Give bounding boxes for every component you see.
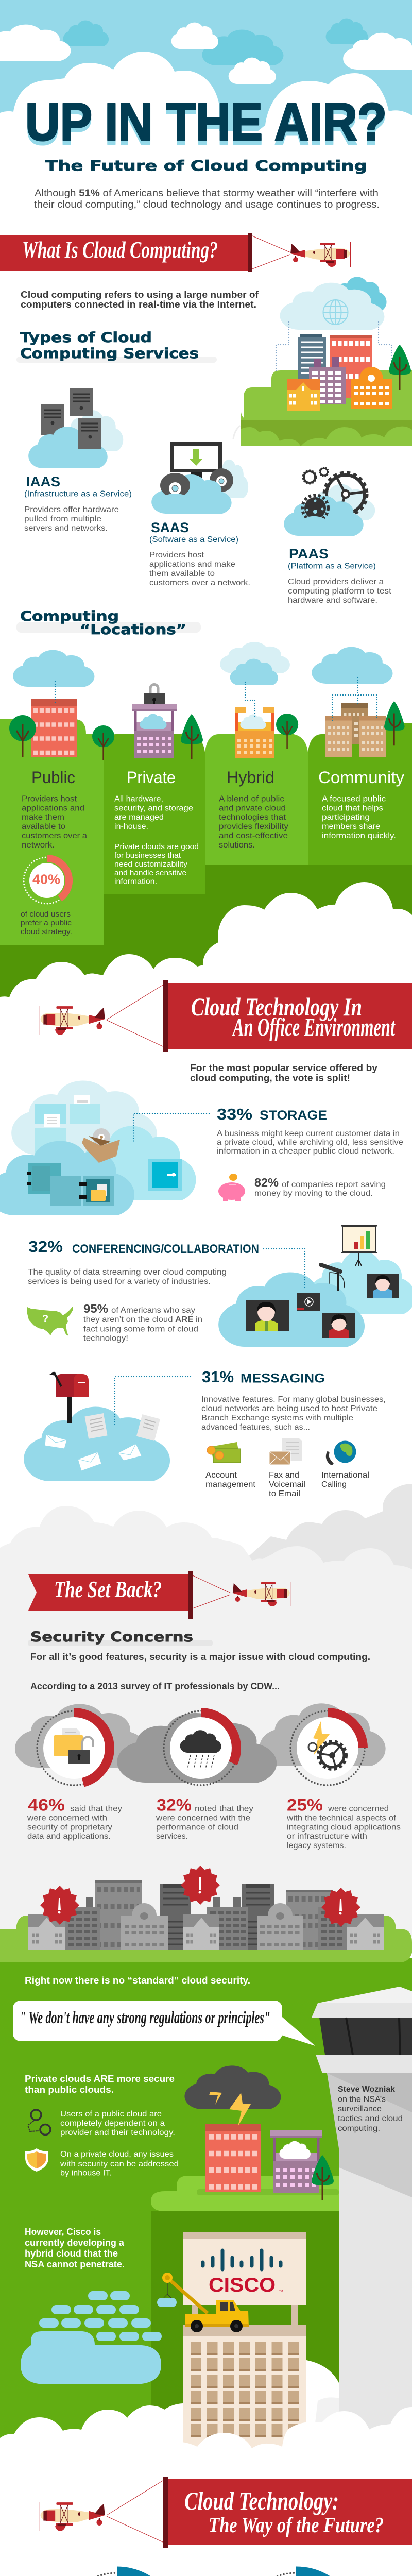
title: UP IN THE AIR? (25, 96, 387, 156)
illustration: storage clouds (0, 1080, 209, 1215)
panel: private text: All hardware, (114, 794, 163, 804)
feature label: account management (205, 1471, 256, 1489)
stat: 46% (27, 1796, 122, 1841)
SAAS text (149, 520, 250, 587)
PAAS text: Cloud providers deliver a (288, 578, 384, 586)
95% stat: 95% (83, 1302, 108, 1315)
private cloud text (60, 2150, 179, 2177)
banner: cloud technology way of the future (40, 2477, 412, 2548)
hero sky with clouds (0, 0, 412, 152)
IAAS text: IAAS (26, 474, 60, 489)
heading: computing locations (16, 608, 201, 638)
PAAS text: computing platform to test (288, 587, 392, 596)
storm cloud over buildings on green hill (151, 2065, 339, 2211)
donut chart: 40%: 40% (32, 872, 60, 887)
feature label: fax and voicemail: to Email (269, 1489, 300, 1498)
stat: 32% (156, 1796, 253, 1841)
conferencing stat: services is being used for a variety of industries. (28, 1277, 211, 1286)
banner: cloud technology way of the future: Cloud Technology: (184, 2486, 339, 2515)
hybrid location illustration (220, 642, 298, 758)
panel: hybrid text: technologies that (219, 813, 286, 822)
donut chart: 40% (24, 857, 70, 904)
private cloud text: by inhouse IT. (60, 2169, 112, 2177)
panel: community text: Community (318, 768, 404, 787)
statement: no standard security: Right now there is no “standard” cloud security. (25, 1975, 250, 1986)
panel: private text: are managed (114, 813, 164, 822)
PAAS text: hardware and software. (288, 596, 377, 605)
feature label: fax and voicemail (269, 1471, 305, 1498)
banner: what is cloud computing: What Is Cloud Computing? (22, 236, 218, 263)
private cloud text: with security can be addressed (60, 2160, 179, 2168)
heading: computing locations: “Locations” (80, 622, 186, 638)
panel: public text: available to (22, 822, 65, 831)
PAAS text (288, 546, 392, 605)
panel: private text: information. (114, 877, 157, 886)
PAAS text: (Platform as a Service) (288, 562, 376, 571)
messaging stat: MESSAGING (241, 1371, 325, 1386)
SAAS text: applications and make (149, 560, 235, 569)
Cisco text block: However, Cisco is (25, 2227, 101, 2237)
messaging stat: Innovative features. For many global businesses, (201, 1395, 386, 1404)
icon: shield (25, 2148, 48, 2172)
conferencing stat: CONFERENCING/COLLABORATION (72, 1242, 259, 1256)
public stat caption (21, 910, 72, 936)
panel: public text: Public (31, 768, 75, 787)
illustration: city island under cloud (233, 277, 412, 453)
illustration: messaging cloud (24, 1371, 191, 1481)
icon: handcuffs (28, 2110, 50, 2135)
Wozniak caption (338, 2085, 403, 2133)
panel: hybrid text: and private cloud (219, 804, 286, 813)
icon: US map (27, 1307, 73, 1336)
subtitle: The Future of Cloud Computing (45, 157, 367, 174)
messaging stat: Branch Exchange systems with multiple (201, 1414, 353, 1422)
stat: 25%: 25% (287, 1796, 323, 1815)
definition text: computers connected in real-time via the Internet. (21, 299, 256, 310)
stat: 46%: data and applications. (27, 1832, 111, 1841)
illustration: brick cloud (21, 2291, 162, 2384)
community location illustration (312, 647, 405, 757)
grey section background with cloud top (0, 1484, 412, 1937)
feature label: international calling: Calling (321, 1480, 347, 1489)
feature label: fax and voicemail: Fax and (269, 1471, 299, 1480)
circle chart: 46% (37, 1711, 111, 1785)
panel: community text: cloud that helps (322, 804, 383, 813)
icon: account management money (207, 1442, 241, 1463)
definition text: Cloud computing refers to using a large number of (21, 290, 259, 300)
banner: what is cloud computing (0, 233, 351, 272)
95% stat: of Americans who say (111, 1306, 195, 1315)
panel: hybrid text: and cost-effective (219, 832, 288, 840)
feature label: international calling: International (321, 1471, 369, 1480)
white cloud bank below locations (0, 882, 412, 1082)
IAAS text (24, 474, 132, 533)
IAAS text: Providers offer hardware (24, 505, 119, 514)
callout: speech bubble quote (13, 2001, 315, 2046)
feature label: account management: management (205, 1480, 256, 1489)
82% stat: 82% (254, 1176, 279, 1189)
stat: 46%: 46% (28, 1796, 65, 1815)
icon: fax and email (269, 1438, 302, 1465)
IAAS text: pulled from multiple (24, 515, 101, 523)
messaging stat: cloud networks are being used to host Private (201, 1404, 377, 1413)
stat: 32%: were concerned with the (156, 1814, 250, 1823)
conferencing stat: 32% (28, 1238, 63, 1256)
Wozniak caption: computing. (338, 2124, 380, 2133)
95% stat (83, 1302, 202, 1343)
private cloud text: On a private cloud, any issues (60, 2150, 174, 2159)
stat: 46%: were concerned with (27, 1814, 107, 1823)
definition text (21, 290, 259, 310)
storage stat: STORAGE (260, 1108, 327, 1123)
feature label: fax and voicemail: Voicemail (269, 1480, 305, 1489)
panel: public text: applications and (22, 804, 84, 813)
Cisco text block: NSA cannot penetrate. (25, 2259, 125, 2269)
dark green block behind Cisco (151, 2211, 339, 2428)
IAAS: icon servers in cloud (28, 388, 123, 468)
panel: private text: Private clouds are good (114, 842, 199, 851)
intro text: Although 51% of Americans believe that stormy weather will “interfere with (35, 188, 379, 199)
heading: security concerns: Security Concerns (30, 1629, 193, 1645)
public stat caption: cloud strategy. (21, 927, 72, 936)
feature label: account management: Account (205, 1471, 237, 1480)
IAAS text: servers and networks. (24, 524, 108, 533)
statement: private clouds more secure (25, 2074, 175, 2095)
panel: hybrid text: provides flexibility (219, 822, 288, 831)
panel: public text: network. (22, 841, 55, 850)
Cisco text block (25, 2227, 125, 2269)
illustration: Cisco billboard and building (183, 2232, 306, 2452)
public location illustration (9, 650, 114, 760)
storage stat: a private cloud, while archiving old, less sensitive (217, 1138, 403, 1147)
panel: private text: for businesses that (114, 851, 181, 860)
callout: speech bubble quote: " We don't have any strong regulations or principles" (20, 2008, 270, 2027)
illustration: Cisco billboard and building: TM (279, 2290, 283, 2293)
stat: 25%: were concerned (328, 1804, 389, 1814)
office intro text (190, 1063, 377, 1083)
banner: cloud technology in an office environment: Cloud Technology In (191, 992, 362, 1021)
circle chart: 25% (290, 1711, 365, 1785)
banner: the set back: The Set Back? (54, 1576, 162, 1602)
banner: the set back (28, 1571, 290, 1619)
white clouds behind Cisco building (0, 2360, 339, 2468)
heading: computing locations: Computing (20, 608, 119, 624)
stat: 25%: with the technical aspects of (286, 1814, 397, 1823)
Wozniak caption: tactics and cloud (338, 2114, 403, 2123)
panel: public text: make them (22, 813, 64, 822)
public cloud text: provider and their technology. (60, 2128, 175, 2137)
public cloud text: completely dependent on a (60, 2119, 165, 2128)
heading: types of cloud computing services: Types of Cloud (20, 330, 152, 346)
circle chart: personal use (239, 2573, 353, 2576)
Wozniak caption: on the NSA’s (338, 2095, 386, 2104)
grey clouds behind circles (15, 1703, 386, 1783)
SAAS text: them available to (149, 569, 215, 578)
IAAS text: (Infrastructure as a Service) (24, 489, 132, 499)
95% stat: technology! (83, 1334, 128, 1343)
office intro text: For the most popular service offered by (190, 1063, 377, 1073)
messaging stat (201, 1368, 386, 1432)
82% stat (254, 1176, 386, 1198)
intro text: their cloud computing,” cloud technology and usage continues to progress. (34, 199, 380, 210)
circle chart: IT professionals (60, 2573, 174, 2576)
panel: hybrid text: solutions. (219, 841, 255, 850)
stat: 25%: legacy systems. (287, 1841, 346, 1850)
panel: private text (114, 768, 199, 886)
feature label: international calling (321, 1471, 369, 1489)
SAAS text: Providers host (149, 551, 204, 560)
PAAS text: PAAS (289, 546, 329, 562)
SAAS text: SAAS (151, 520, 189, 535)
banner: cloud technology in an office environment (40, 980, 412, 1052)
panel: hybrid text (219, 768, 288, 850)
stat: 32%: noted that they (195, 1804, 253, 1814)
stat: 25% (286, 1796, 401, 1850)
survey lead-in: According to a 2013 survey of IT professionals by CDW... (30, 1681, 280, 1691)
stat: 25%: or infrastructure with (287, 1832, 367, 1841)
panel: private text: and handle sensitive (114, 869, 186, 877)
stat: 32%: 32% (157, 1796, 192, 1815)
messaging stat: advanced features, such as... (201, 1423, 310, 1432)
conferencing stat: The quality of data streaming over cloud computing (28, 1268, 227, 1277)
conferencing stat (28, 1238, 259, 1286)
grey city with alert bursts (28, 1866, 384, 1950)
grey column and Steve Wozniak figure (312, 1987, 412, 2442)
stat: 32%: performance of cloud (156, 1823, 238, 1832)
storage stat: information in a cheaper public cloud network. (217, 1147, 394, 1156)
stat: 46%: security of proprietary (27, 1823, 112, 1832)
icon: piggy bank (218, 1174, 245, 1201)
PAAS: icon gears in cloud (284, 467, 375, 536)
security intro text: For all it’s good features, security is a major issue with cloud computing. (30, 1652, 370, 1662)
locations background: dark green and panels (0, 719, 412, 1005)
storage stat: A business might keep current customer data in (217, 1129, 400, 1138)
circle chart: 32% (164, 1711, 238, 1785)
stat: 25%: integrating cloud applications (287, 1823, 401, 1832)
public cloud text: Users of a public cloud are (60, 2110, 162, 2119)
panel: hybrid text: Hybrid (227, 768, 274, 787)
panel: private text: Private (127, 768, 176, 787)
panel: community text (318, 768, 404, 840)
icon: international calling (326, 1440, 356, 1465)
intro text (34, 188, 380, 210)
Cisco text block: currently developing a (25, 2238, 125, 2248)
SAAS text: customers over a network. (149, 579, 250, 587)
white clouds in front of Cisco building (152, 2407, 412, 2473)
illustration: crane truck with brick (157, 2273, 249, 2332)
public stat caption: prefer a public (21, 919, 72, 927)
95% stat: they aren’t on the cloud ARE in (83, 1315, 202, 1324)
Cisco text block: hybrid cloud that the (25, 2248, 118, 2259)
82% stat: of companies report saving (282, 1180, 386, 1189)
title: UP IN THE AIR? (25, 92, 387, 151)
stat: 32%: services. (156, 1832, 188, 1841)
panel: hybrid text: A blend of public (219, 794, 284, 804)
green section background (0, 1916, 412, 2452)
stat: 46%: said that they (70, 1804, 122, 1814)
SAAS text: (Software as a Service) (149, 535, 238, 544)
illustration: conferencing clouds (218, 1225, 412, 1347)
panel: public text: customers over a (22, 832, 87, 840)
Wozniak caption: Steve Wozniak (338, 2085, 395, 2094)
messaging stat: 31% (202, 1368, 234, 1386)
storage stat (217, 1105, 403, 1156)
statement: private clouds more secure: than public clouds. (25, 2084, 114, 2095)
panel: public text (22, 768, 87, 850)
illustration: Cisco billboard and building: CISCO (209, 2274, 276, 2296)
panel: private text: need customizability (114, 860, 188, 869)
heading: types of cloud computing services: Computing Services (20, 346, 199, 362)
SAAS: icon monitor in cloud (151, 442, 248, 514)
panel: community text: information quickly. (322, 832, 396, 840)
panel: community text: participating (322, 813, 370, 822)
storage stat: 33% (217, 1105, 252, 1123)
82% stat: money by moving to the cloud. (254, 1189, 373, 1198)
icon: US map: ? (42, 1313, 48, 1325)
95% stat: fact using some form of cloud (83, 1325, 198, 1333)
panel: private text: in-house. (114, 822, 148, 831)
public cloud text (60, 2110, 175, 2137)
panel: community text: A focused public (322, 794, 386, 804)
panel: public text: Providers host (22, 794, 77, 804)
panel: community text: members share (322, 822, 380, 831)
statement: private clouds more secure: Private clouds ARE more secure (25, 2074, 175, 2084)
public stat caption: of cloud users (21, 910, 71, 919)
office intro text: cloud computing, the vote is split! (190, 1073, 350, 1083)
private location illustration (132, 685, 203, 759)
heading: types of cloud computing services (16, 330, 217, 363)
Wozniak caption: surveillance (338, 2105, 382, 2113)
panel: private text: security, and storage (114, 804, 193, 813)
